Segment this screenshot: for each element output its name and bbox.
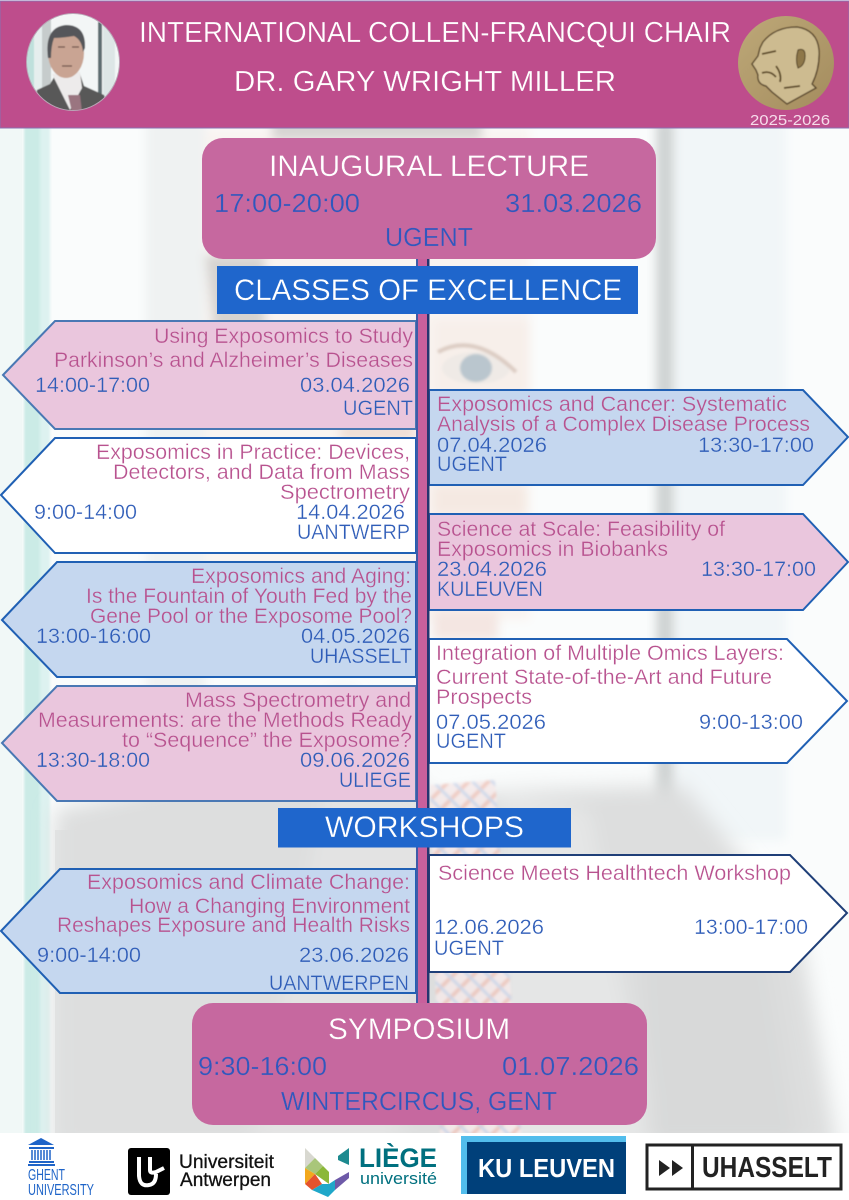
logo: KU Leuven: KU LEUVEN xyxy=(478,1153,615,1183)
time: 9:00-13:00 xyxy=(699,710,803,734)
title: Integration of Multiple Omics Layers: xyxy=(436,641,784,665)
logo: Liege universite xyxy=(305,1142,437,1197)
date: 01.07.2026 xyxy=(502,1051,639,1081)
logo: Liege universite: université xyxy=(360,1169,437,1188)
title xyxy=(139,17,731,98)
panel: symposium xyxy=(192,1003,647,1125)
venue: UANTWERPEN xyxy=(269,971,409,995)
title: Science at Scale: Feasibility of xyxy=(437,517,725,541)
time: 14:00-17:00 xyxy=(35,373,150,397)
venue: UHASSELT xyxy=(310,644,412,668)
heading: INAUGURAL LECTURE xyxy=(269,150,589,183)
title xyxy=(96,440,410,504)
logo: Universiteit Antwerpen xyxy=(128,1148,275,1195)
venue: ULIEGE xyxy=(339,768,411,792)
title xyxy=(436,641,784,709)
venue: UANTWERP xyxy=(297,520,410,544)
logo: Universiteit Antwerpen: Antwerpen xyxy=(180,1170,271,1191)
venue: WINTERCIRCUS, GENT xyxy=(281,1086,557,1116)
logo: Ghent University: GHENT xyxy=(28,1167,65,1184)
date: 14.04.2026 xyxy=(296,500,405,524)
time: 17:00-20:00 xyxy=(214,188,360,218)
title: Current State-of-the-Art and Future xyxy=(436,665,772,689)
panel: class Mass Spectrometry xyxy=(2,686,416,801)
time: 13:00-17:00 xyxy=(694,915,808,939)
portrait photo xyxy=(26,12,120,112)
title: Gene Pool or the Exposome Pool? xyxy=(90,604,412,628)
title xyxy=(54,324,413,372)
panel: inaugural lecture xyxy=(202,138,656,259)
title: Is the Fountain of Youth Fed by the xyxy=(86,584,412,608)
venue: UGENT xyxy=(436,729,506,753)
title: Analysis of a Complex Disease Process xyxy=(437,412,810,436)
title: Measurements: are the Methods Ready xyxy=(38,708,412,732)
title: Exposomics and Climate Change: xyxy=(87,870,410,894)
title: INTERNATIONAL COLLEN-FRANCQUI CHAIR xyxy=(139,17,731,49)
signpost pole xyxy=(416,258,430,1004)
date: 09.06.2026 xyxy=(300,748,410,772)
logo: KU Leuven xyxy=(461,1136,626,1194)
title: Exposomics and Aging: xyxy=(191,564,411,588)
title: Exposomics in Practice: Devices, xyxy=(96,440,410,464)
time: 13:30-17:00 xyxy=(701,557,816,581)
logo: Liege universite: LIÈGE xyxy=(359,1142,437,1173)
title: Prospects xyxy=(436,685,532,709)
panel: class Aging xyxy=(2,562,416,677)
date: 31.03.2026 xyxy=(505,188,642,218)
years label: 2025-2026 xyxy=(750,112,830,129)
date: 23.06.2026 xyxy=(299,943,409,967)
venue: UGENT xyxy=(437,452,507,476)
panel: class Biobanks xyxy=(429,514,848,610)
date: 04.05.2026 xyxy=(301,624,410,648)
panel: class Omics Layers xyxy=(429,639,847,763)
title: Exposomics in Biobanks xyxy=(437,537,668,561)
panel: class Cancer xyxy=(429,390,848,485)
heading: SYMPOSIUM xyxy=(328,1013,510,1046)
panel: class Devices and Detectors xyxy=(1,438,416,553)
title: Reshapes Exposure and Health Risks xyxy=(57,913,410,937)
time: 13:30-18:00 xyxy=(36,748,150,772)
title xyxy=(437,392,810,436)
panel: workshop Climate Change xyxy=(1,869,416,995)
panel: workshop Healthtech xyxy=(429,855,847,972)
title xyxy=(86,564,412,628)
time: 13:30-17:00 xyxy=(698,433,814,457)
date: 03.04.2026 xyxy=(300,373,410,397)
time: 9:30-16:00 xyxy=(198,1051,327,1081)
heading: workshops: WORKSHOPS xyxy=(325,811,524,844)
date: 12.06.2026 xyxy=(434,915,544,939)
panel: class Parkinson's and Alzheimer's xyxy=(3,321,416,429)
title: Exposomics and Cancer: Systematic xyxy=(437,392,787,416)
title: Using Exposomics to Study xyxy=(154,324,413,348)
date: 07.05.2026 xyxy=(436,710,546,734)
time: 9:00-14:00 xyxy=(37,943,141,967)
logo: UHasselt xyxy=(647,1145,841,1189)
heading: classes of excellence xyxy=(217,266,638,314)
header banner xyxy=(0,1,849,129)
title: Science Meets Healthtech Workshop xyxy=(438,861,791,885)
venue: UGENT xyxy=(434,936,504,960)
venue: UGENT xyxy=(385,222,473,252)
time: 9:00-14:00 xyxy=(34,500,137,524)
heading: classes of excellence: CLASSES OF EXCELLENCE xyxy=(234,274,622,307)
logo: Universiteit Antwerpen: Universiteit xyxy=(179,1152,275,1173)
title: Spectrometry xyxy=(280,480,410,504)
title: Detectors, and Data from Mass xyxy=(113,460,410,484)
title xyxy=(57,870,410,937)
title: How a Changing Environment xyxy=(129,894,410,918)
title xyxy=(38,688,412,752)
title: Mass Spectrometry and xyxy=(185,688,411,712)
medal xyxy=(738,16,834,110)
heading: workshops xyxy=(278,808,571,848)
logo: Ghent University: UNIVERSITY xyxy=(28,1182,94,1199)
time: 13:00-16:00 xyxy=(36,624,151,648)
logo strip xyxy=(0,1133,849,1200)
title: Parkinson’s and Alzheimer’s Diseases xyxy=(54,348,413,372)
title xyxy=(437,517,725,561)
date: 07.04.2026 xyxy=(437,433,547,457)
title: DR. GARY WRIGHT MILLER xyxy=(234,66,616,98)
title: to “Sequence” the Exposome? xyxy=(122,728,412,752)
logo: Ghent University xyxy=(28,1138,94,1199)
venue: KULEUVEN xyxy=(437,577,543,601)
venue: UGENT xyxy=(343,396,413,420)
date: 23.04.2026 xyxy=(437,557,547,581)
